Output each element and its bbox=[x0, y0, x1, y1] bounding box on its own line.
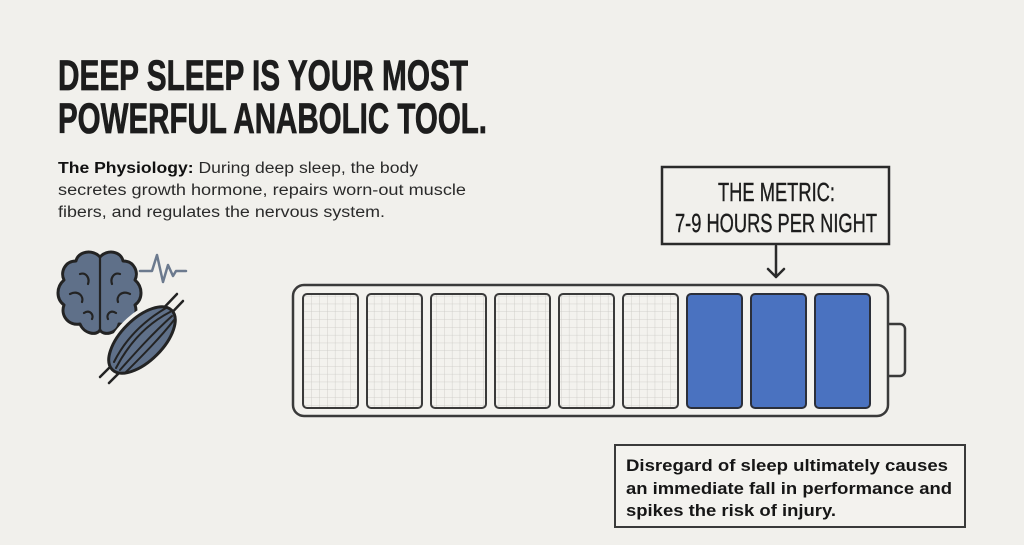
empty cells bbox=[303, 294, 678, 408]
filled cells bbox=[687, 294, 870, 408]
callout: the metric bbox=[662, 167, 889, 244]
callout: warning: an immediate fall in performance and bbox=[626, 480, 952, 498]
text block: physiology bbox=[58, 160, 466, 221]
callout: warning bbox=[615, 445, 965, 527]
callout: warning: spikes the risk of injury. bbox=[626, 502, 836, 520]
icon: pulse line bbox=[140, 255, 186, 282]
arrow bbox=[768, 246, 784, 277]
title bbox=[58, 52, 487, 143]
callout: the metric: 7-9 HOURS PER NIGHT bbox=[675, 208, 877, 238]
callout: the metric: THE METRIC: bbox=[718, 177, 835, 207]
title: DEEP SLEEP IS YOUR MOST bbox=[58, 52, 468, 100]
text block: physiology: fibers, and regulates the nervous system. bbox=[58, 204, 385, 221]
callout: warning: Disregard of sleep ultimately causes bbox=[626, 457, 948, 475]
text block: physiology: The Physiology: During deep sleep, the body bbox=[58, 160, 418, 177]
battery chart bbox=[293, 285, 905, 416]
icon: brain bbox=[58, 252, 141, 333]
icon: muscle bbox=[97, 294, 187, 385]
icon: brain and muscle bbox=[58, 252, 187, 385]
text block: physiology: secretes growth hormone, repairs worn-out muscle bbox=[58, 182, 466, 199]
title: POWERFUL ANABOLIC TOOL. bbox=[58, 95, 487, 143]
